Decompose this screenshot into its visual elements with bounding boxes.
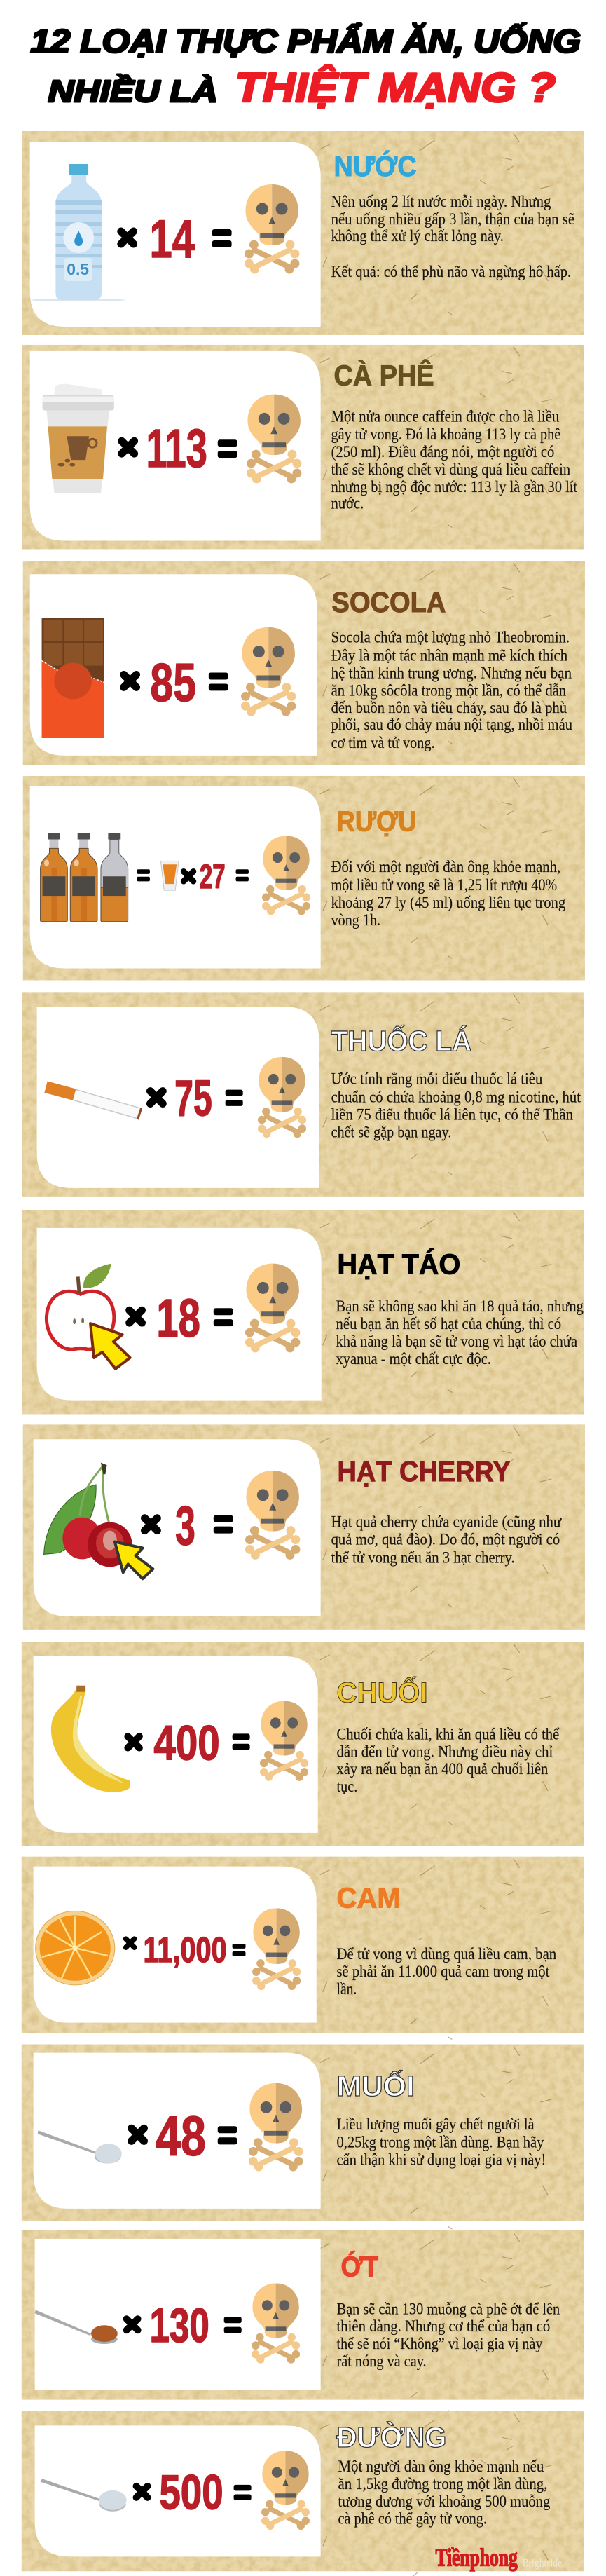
body text: thể tử vong nếu ăn 3 hạt cherry. [331, 1548, 515, 1566]
icon: pointer arrow [115, 1542, 153, 1579]
icon: orange slice [36, 1911, 115, 1985]
number: 85 [150, 653, 196, 713]
white card [30, 786, 321, 969]
multiply sign [127, 2319, 138, 2330]
body text: 0,25kg trong một lần dùng. Bạn hãy [337, 2133, 544, 2151]
panel: hạt cherry [23, 1424, 585, 1630]
body text: thể sẽ nói “Không” vì loại gia vị này [337, 2335, 543, 2352]
icon: skull [258, 1057, 306, 1138]
equals sign [209, 673, 228, 690]
icon: shot glass [160, 861, 179, 890]
icon: skull [249, 2083, 303, 2172]
title: 12 LOẠI THỰC PHẨM ĂN, UỐNG [31, 22, 581, 60]
icon: coffee cup [43, 384, 114, 493]
equals sign [218, 2126, 237, 2144]
heading: CHUỐI [337, 1677, 428, 1709]
body text: Socola chứa một lượng nhỏ Theobromin. [331, 629, 570, 646]
number: 75 [174, 1070, 212, 1126]
body text: liền 75 điếu thuốc lá liên tục, có thể Thần [331, 1105, 574, 1123]
logo: Tiền Phong: Tiềnphong [435, 2543, 518, 2571]
body text: phổi, sau đó chảy máu nội tạng, nhồi máu [331, 716, 573, 733]
icon: skull [241, 627, 296, 716]
heading: NƯỚC [334, 150, 417, 182]
heading: HẠT CHERRY [338, 1455, 511, 1487]
multiply sign [145, 1518, 157, 1531]
icon: spoon of chili [35, 2310, 118, 2344]
body text: Đây là một tác nhân mạnh mẽ kích thích [331, 647, 568, 665]
multiply sign [128, 1736, 139, 1748]
body text: Kết quả: có thể phù não và ngừng hô hấp. [331, 263, 571, 280]
icon: skull [245, 1264, 300, 1352]
icon: skull [261, 2451, 310, 2530]
panel: cam [22, 1857, 584, 2040]
panel: đường [22, 2411, 584, 2576]
icon: apple with seeds [46, 1264, 114, 1349]
equals sign [226, 1090, 243, 1106]
heading: ỚT [340, 2251, 378, 2283]
number: 3 [175, 1494, 195, 1557]
panel: cà phê [22, 345, 584, 549]
body text: Để tử vong vì dùng quá liều cam, bạn [337, 1945, 557, 1963]
icon: skull [252, 1908, 301, 1990]
heading: RƯỢU [337, 805, 417, 838]
body text: xyanua - một chất cực độc. [336, 1350, 491, 1368]
icon: water bottle [31, 164, 125, 301]
multiply sign [136, 2486, 148, 2497]
icon: skull [260, 1701, 308, 1781]
body text [337, 2300, 560, 2370]
body text: một liều tử vong sẽ là 1,25 lít rượu 40% [331, 876, 557, 894]
body text: dẫn đến tử vong. Nhưng điều này chỉ [337, 1743, 553, 1760]
body text: cơ tim và tử vong. [331, 734, 434, 751]
panel: rượu [23, 776, 585, 980]
body text: tục. [337, 1778, 357, 1795]
multiply sign [122, 441, 135, 454]
equals sign [137, 869, 150, 881]
number: 113 [146, 419, 207, 479]
icon: skull [245, 1471, 300, 1560]
body text: Chuối chứa kali, khi ăn quá liều có thể [337, 1725, 560, 1743]
body text: quả mơ, quả đào). Do đó, một người có [331, 1530, 560, 1548]
icon: skull [262, 836, 310, 915]
white card [35, 2239, 321, 2390]
number: 400 [153, 1715, 220, 1770]
body text: không thể xử lý chất lỏng này. [331, 227, 504, 245]
body text: khả năng là bạn sẽ tử vong vì hạt táo chứa [336, 1333, 577, 1350]
icon: banana [51, 1686, 130, 1792]
icon: skull [245, 184, 299, 273]
body text: tương đương với khoảng 500 muỗng [338, 2493, 550, 2510]
body text: hệ thần kinh trung ương. Nhưng nếu bạn [331, 664, 572, 681]
panel: ớt [22, 2230, 584, 2413]
body text: Liều lượng muối gây chết người là [337, 2115, 534, 2133]
title: NHIỀU LÀ [48, 74, 218, 109]
body text: thể sẽ không chết vì dùng quá liều caffein [331, 461, 571, 478]
body text [331, 1513, 562, 1566]
credit: Brightside: Brightside [523, 2557, 562, 2569]
body text: gây tử vong. Đó là khoảng 113 ly cà phê [331, 425, 560, 443]
body text: rất nóng và cay. [337, 2352, 427, 2370]
white card [30, 351, 321, 540]
title [31, 22, 581, 111]
number: 500 [159, 2465, 223, 2520]
multiply sign [121, 231, 134, 244]
body text: nước. [331, 495, 364, 512]
body text [337, 1725, 560, 1795]
equals sign [214, 1515, 233, 1534]
body text: ăn 10kg sôcôla trong một lần, có thể dẫn [331, 681, 567, 699]
white card [37, 1007, 319, 1188]
number: 48 [156, 2105, 206, 2167]
body text: Một nửa ounce caffein được cho là liều [331, 407, 560, 425]
multiply sign [130, 1310, 142, 1323]
body text: nếu bạn ăn hết số hạt của chúng, thì có [336, 1315, 561, 1333]
white card [34, 1867, 317, 2023]
icon: cigarette [46, 1087, 141, 1114]
body text: (250 ml). Điều đáng nói, một người có [331, 443, 554, 461]
icon: cherries with leaf [44, 1464, 132, 1567]
body text: đến buồn nôn và tiêu chảy, sau đó là phù [331, 699, 567, 716]
body text: nếu uống nhiều gấp 3 lần, thận của bạn sẽ [331, 210, 574, 228]
icon: chocolate bar [42, 618, 104, 738]
multiply sign [124, 675, 137, 687]
heading: SOCOLA [332, 586, 446, 618]
icon: pointer arrow [90, 1323, 130, 1369]
number: 14 [149, 210, 195, 269]
equals sign [224, 2317, 242, 2333]
heading: THUỐC LÁ [331, 1025, 471, 1057]
number: 11,000 [144, 1930, 227, 1970]
equals sign [214, 1308, 233, 1326]
body text: Đối với một người đàn ông khỏe mạnh, [331, 858, 560, 875]
icon: skull [247, 395, 301, 483]
body text: Ước tính rằng mỗi điếu thuốc lá tiêu [331, 1070, 543, 1088]
panel: thuốc lá [22, 992, 584, 1197]
body text: thiên đàng. Nhưng cơ thể của bạn có [337, 2317, 550, 2335]
number: 130 [149, 2298, 209, 2352]
heading: CAM [337, 1881, 401, 1914]
body text: cà phê có thể gây tử vong. [338, 2510, 487, 2528]
title: THIỆT MẠNG ? [235, 65, 556, 111]
body text: vòng 1h. [331, 911, 380, 929]
body text [336, 1297, 584, 1368]
panel: hạt táo [22, 1210, 584, 1414]
icon: skull [252, 2284, 300, 2364]
panel: socola [23, 561, 585, 765]
panel: chuối [22, 1642, 584, 1846]
white card [34, 2053, 321, 2209]
equals sign [233, 1944, 245, 1956]
equals sign [218, 439, 237, 458]
white card [37, 1228, 322, 1401]
white card [30, 574, 317, 756]
body text: chết sẽ gặp bạn ngay. [331, 1123, 451, 1140]
icon: water bottle: 0.5 [67, 260, 89, 278]
multiply sign [126, 1939, 135, 1947]
body text [337, 2115, 546, 2169]
icon: three liquor bottles [41, 833, 128, 922]
body text: nhưng bị ngộ độc nước: 113 ly là gần 30 lít [331, 478, 578, 496]
number: 27 [200, 859, 226, 896]
body text [338, 2458, 550, 2528]
equals sign [234, 2485, 252, 2500]
equals sign [212, 229, 232, 247]
heading: CÀ PHÊ [334, 360, 434, 392]
multiply sign [150, 1091, 163, 1104]
body text [331, 858, 565, 929]
number: 18 [156, 1289, 200, 1349]
body text: cẩn thận khi sử dụng loại gia vị này! [337, 2151, 546, 2169]
body text: Bạn sẽ không sao khi ăn 18 quả táo, nhưng [336, 1297, 584, 1315]
panel: muối [22, 2045, 584, 2229]
body text [337, 1945, 557, 1998]
heading: ĐƯỜNG [337, 2421, 446, 2453]
body text: sẽ phải ăn 11.000 quả cam trong một [337, 1963, 550, 1980]
body text: lần. [337, 1980, 357, 1998]
white card [34, 1656, 318, 1833]
body text: Bạn sẽ cần 130 muỗng cà phê ớt để lên [337, 2300, 560, 2317]
panel: nước [22, 131, 584, 335]
heading: MUỐI [337, 2070, 415, 2102]
body text [331, 193, 574, 280]
icon: spoon of sugar [41, 2479, 127, 2512]
equals sign [236, 869, 249, 881]
body text: chuẩn có chứa khoảng 0,8 mg nicotine, hút [331, 1089, 581, 1106]
body text [331, 407, 578, 512]
body text: khoảng 27 ly (45 ml) uống liên tục trong [331, 894, 565, 911]
icon: spoon of salt [38, 2130, 122, 2164]
body text: Một người đàn ông khỏe mạnh nếu [338, 2458, 544, 2475]
body text: Nên uống 2 lít nước mỗi ngày. Nhưng [331, 193, 551, 210]
multiply sign [132, 2128, 144, 2141]
heading: HẠT TÁO [338, 1248, 460, 1281]
body text [331, 629, 573, 751]
equals sign [233, 1733, 250, 1750]
white card [34, 1439, 321, 1616]
white card [35, 2425, 321, 2556]
body text: xảy ra nếu bạn ăn 400 quả chuối liên [337, 1760, 549, 1778]
white card [30, 142, 321, 327]
multiply sign [184, 871, 193, 881]
body text [331, 1070, 581, 1140]
body text: Hạt quả cherry chứa cyanide (cũng như [331, 1513, 562, 1531]
body text: ăn 1,5kg đường trong một lần dùng, [338, 2475, 547, 2493]
